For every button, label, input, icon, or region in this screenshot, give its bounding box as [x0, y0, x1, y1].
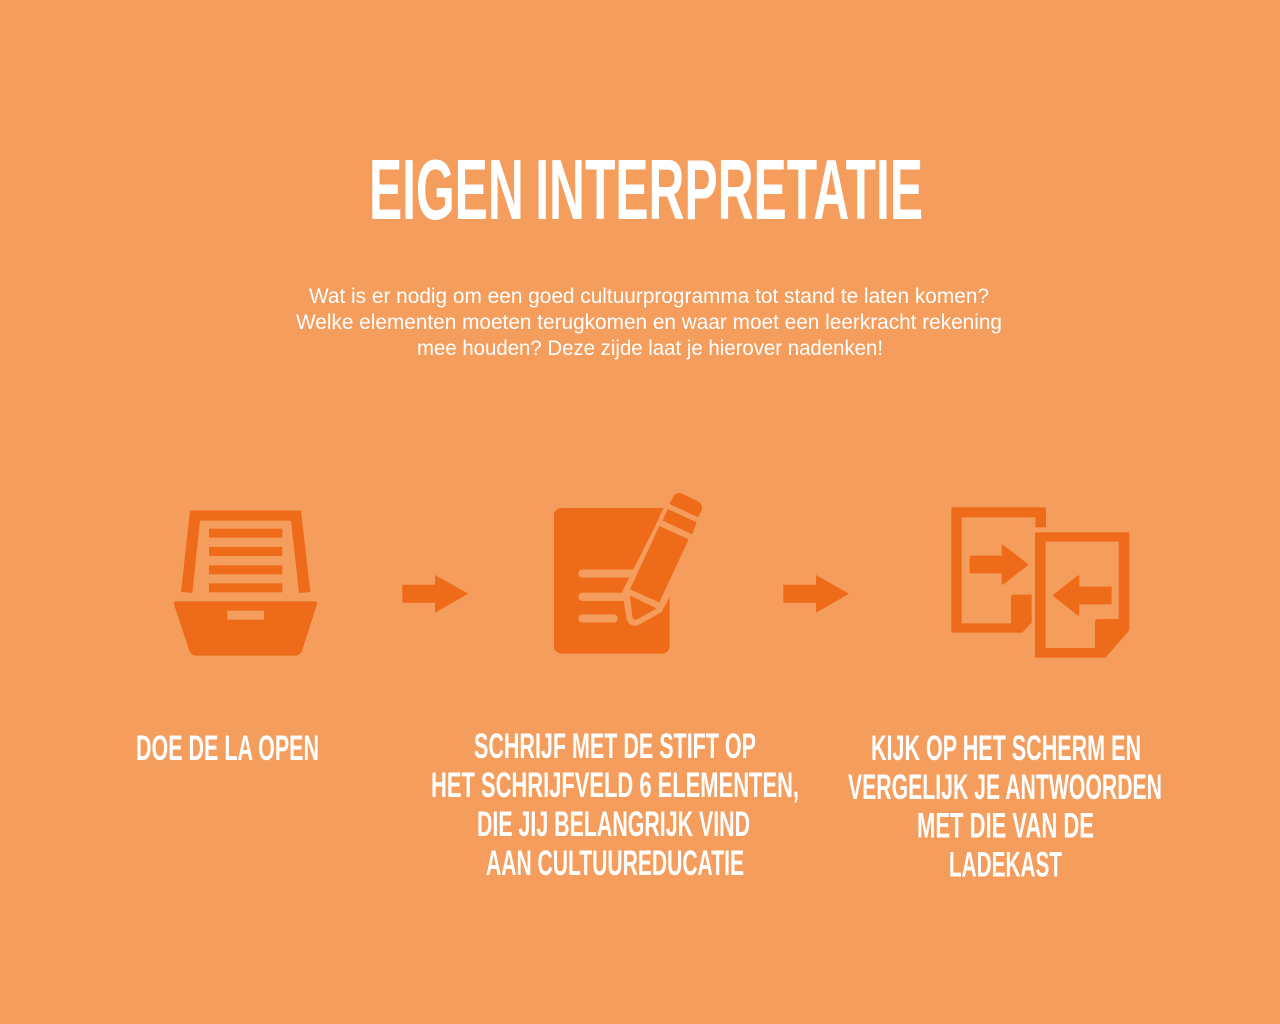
label: step one: DOE DE LA OPEN [136, 728, 319, 768]
intro text block [296, 285, 1002, 360]
icon: open drawer [174, 511, 317, 656]
label: step two: DIE JIJ BELANGRIJK VIND [477, 804, 750, 844]
label: step three: MET DIE VAN DE [917, 806, 1094, 846]
label: step three [848, 728, 1162, 884]
label: step three: LADEKAST [949, 844, 1062, 884]
label: step two [431, 726, 799, 883]
intro text block: Welke elementen moeten terugkomen en waar moet een leerkracht rekening [296, 311, 1002, 334]
label: step two: HET SCHRIJFVELD 6 ELEMENTEN, [431, 765, 799, 805]
arrow: step one to step two [402, 575, 468, 613]
intro text block: Wat is er nodig om een goed cultuurprogramma tot stand te laten komen? [309, 285, 989, 308]
arrow: step two to step three [783, 575, 849, 613]
icon: paper and pencil [554, 493, 707, 654]
intro text block: mee houden? Deze zijde laat je hierover nadenken! [417, 337, 883, 360]
icon: two compared pages with arrows [952, 508, 1128, 657]
label: step two: SCHRIJF MET DE STIFT OP [474, 726, 756, 766]
label: step two: AAN CULTUUREDUCATIE [486, 843, 744, 883]
